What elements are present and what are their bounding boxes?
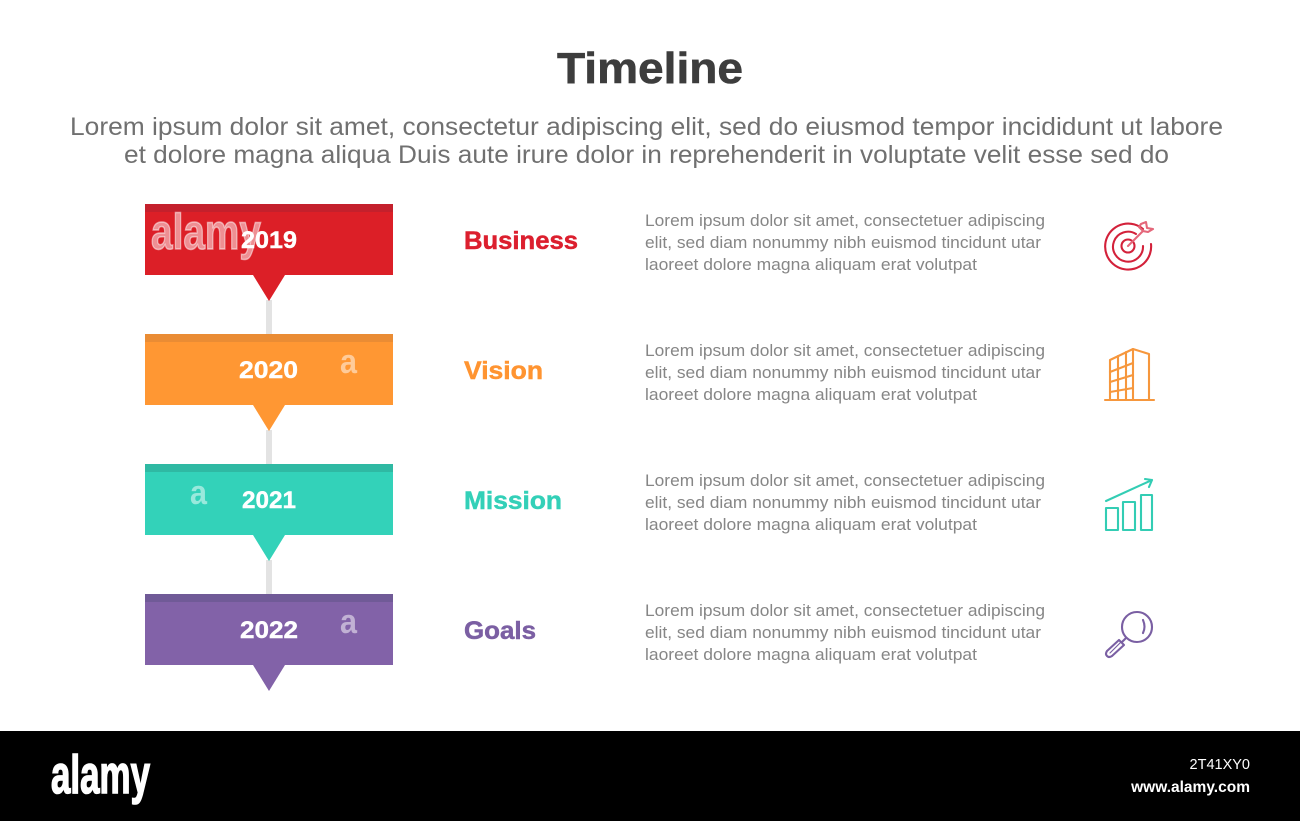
year marker 2022: 2022 <box>240 617 298 644</box>
footer bar <box>0 731 1300 821</box>
website: www.alamy.com <box>1130 779 1250 796</box>
description: Goals: laoreet dolore magna aliquam erat volutpat <box>645 645 977 664</box>
description: Business: Lorem ipsum dolor sit amet, consectetuer adipiscing <box>645 211 1045 230</box>
description: Mission: elit, sed diam nonummy nibh euismod tincidunt utar <box>645 493 1041 512</box>
description: Mission: laoreet dolore magna aliquam erat volutpat <box>645 515 977 534</box>
description: Goals: elit, sed diam nonummy nibh euismod tincidunt utar <box>645 623 1041 642</box>
year marker 2019: 2019 <box>241 227 297 254</box>
title: Timeline <box>557 44 743 93</box>
year marker 2020 <box>145 334 393 431</box>
subtitle text block <box>70 113 1223 169</box>
year marker 2022 <box>145 594 393 691</box>
description: Vision <box>645 341 1045 404</box>
panel: 2019 Business <box>145 204 1153 301</box>
image id: 2T41XY0 <box>1190 757 1250 773</box>
year marker 2020: 2020 <box>239 357 298 384</box>
year marker 2019: alamy <box>151 204 261 260</box>
description: Vision: laoreet dolore magna aliquam erat volutpat <box>645 385 977 404</box>
panel: 2022 Goals <box>145 594 1152 691</box>
panel: 2021 Mission <box>145 464 1152 561</box>
subtitle text block: Lorem ipsum dolor sit amet, consectetur adipiscing elit, sed do eiusmod tempor incididunt ut labore <box>70 113 1223 141</box>
icon: target with arrow <box>1105 222 1153 270</box>
heading: Goals: Goals <box>464 617 536 645</box>
description: Mission: Lorem ipsum dolor sit amet, consectetuer adipiscing <box>645 471 1045 490</box>
year marker 2020: a <box>340 343 358 381</box>
description: Vision: elit, sed diam nonummy nibh euismod tincidunt utar <box>645 363 1041 382</box>
timeline connector lines <box>266 300 272 594</box>
heading: Vision: Vision <box>464 357 543 385</box>
description: Mission <box>645 471 1045 534</box>
year marker 2021 <box>145 464 393 561</box>
panel: 2020 Vision <box>145 334 1154 431</box>
icon: building <box>1105 349 1154 400</box>
heading: Business: Business <box>464 227 578 255</box>
description: Business: elit, sed diam nonummy nibh euismod tincidunt utar <box>645 233 1041 252</box>
icon: growth chart with arrow <box>1106 479 1152 530</box>
year marker 2022: a <box>340 603 358 641</box>
description: Goals: Lorem ipsum dolor sit amet, consectetuer adipiscing <box>645 601 1045 620</box>
footer logo: alamy <box>51 745 150 805</box>
year marker 2021: a <box>190 474 208 512</box>
subtitle text block: et dolore magna aliqua Duis aute irure dolor in reprehenderit in voluptate velit esse sed do <box>124 141 1169 169</box>
description: Vision: Lorem ipsum dolor sit amet, consectetuer adipiscing <box>645 341 1045 360</box>
year marker 2019 <box>145 204 393 301</box>
year marker 2021: 2021 <box>242 487 296 514</box>
icon: magnifying glass <box>1106 612 1152 657</box>
description: Goals <box>645 601 1045 664</box>
heading: Mission: Mission <box>464 487 562 515</box>
description: Business: laoreet dolore magna aliquam erat volutpat <box>645 255 977 274</box>
description: Business <box>645 211 1045 274</box>
